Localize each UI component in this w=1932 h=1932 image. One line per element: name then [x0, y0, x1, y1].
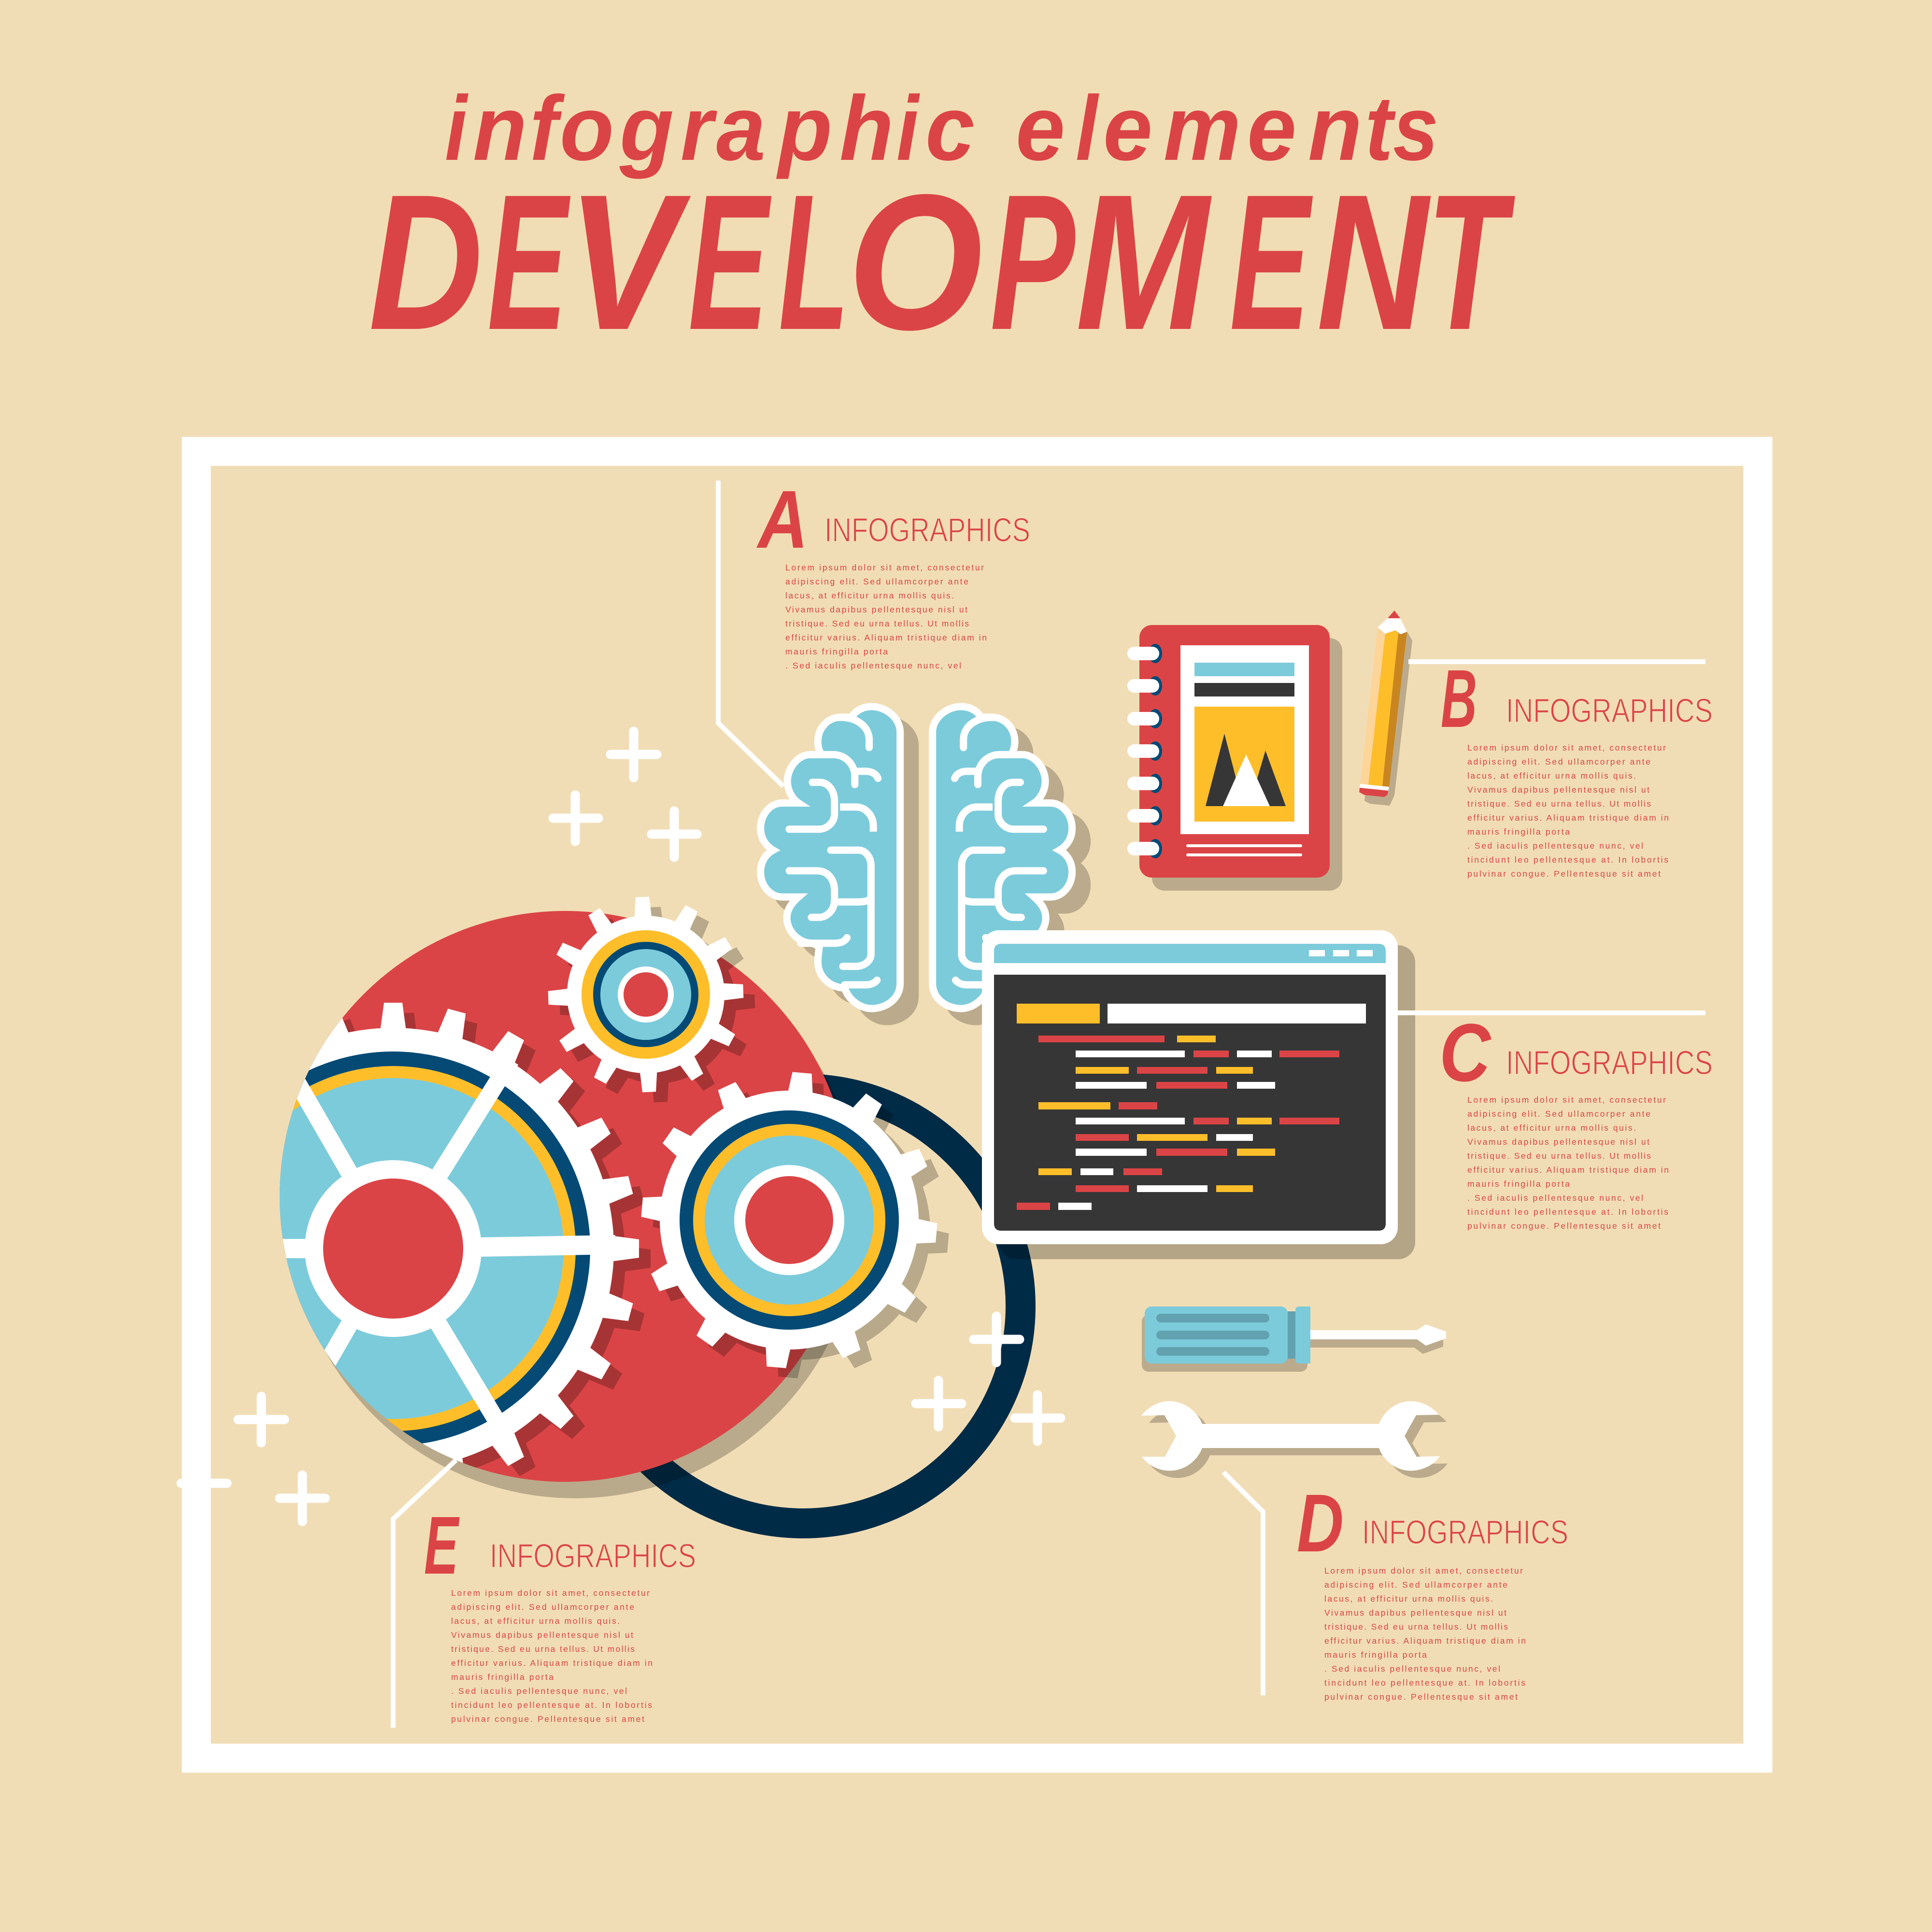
title: infographic elements: i: [896, 77, 921, 180]
section D: [1297, 1477, 1568, 1702]
section E: adipiscing elit. Sed ullamcorper ante: [451, 1602, 634, 1612]
large gear: [280, 1003, 651, 1476]
section E: E: [424, 1500, 460, 1591]
section B: B: [1441, 653, 1477, 745]
section E: tristique. Sed eu urna tellus. Ut mollis: [451, 1644, 635, 1654]
title: infographic elements: e: [1103, 77, 1152, 180]
section D: tincidunt leo pellentesque at. In lobortis: [1324, 1678, 1525, 1688]
section B: lacus, at efficitur urna mollis quis.: [1467, 771, 1636, 781]
section B: adipiscing elit. Sed ullamcorper ante: [1467, 757, 1650, 767]
title: DEVELOPMENT: M: [1076, 154, 1213, 370]
plus signs: [181, 731, 1061, 1521]
section D: Vivamus dapibus pellentesque nisl ut: [1324, 1608, 1506, 1618]
wrench: [1141, 1401, 1448, 1478]
title: infographic elements: h: [839, 77, 894, 180]
leader lines: [393, 481, 1705, 1728]
section D: . Sed iaculis pellentesque nunc, vel: [1324, 1664, 1500, 1674]
section D: D: [1297, 1477, 1344, 1569]
title: infographic elements: t: [1365, 77, 1396, 180]
code window: [982, 930, 1415, 1259]
section C: adipiscing elit. Sed ullamcorper ante: [1467, 1109, 1650, 1119]
pencil: [1359, 611, 1412, 806]
title: infographic elements: g: [619, 77, 674, 180]
section A: lacus, at efficitur urna mollis quis.: [785, 591, 954, 600]
section B: INFOGRAPHICS: [1506, 692, 1713, 729]
section D: pulvinar congue. Pellentesque sit amet: [1324, 1692, 1518, 1702]
section A: Lorem ipsum dolor sit amet, consectetur: [785, 563, 984, 572]
title: infographic elements: c: [925, 77, 975, 180]
section C: INFOGRAPHICS: [1506, 1044, 1713, 1081]
section C: Lorem ipsum dolor sit amet, consectetur: [1467, 1095, 1666, 1105]
section C: tristique. Sed eu urna tellus. Ut mollis: [1467, 1151, 1651, 1161]
small gear: [548, 896, 755, 1103]
section A: A: [756, 474, 808, 566]
section D: efficitur varius. Aliquam tristique diam in: [1324, 1636, 1526, 1646]
section A: Vivamus dapibus pellentesque nisl ut: [785, 605, 967, 614]
section C: . Sed iaculis pellentesque nunc, vel: [1467, 1193, 1643, 1203]
title: DEVELOPMENT: E: [1230, 154, 1314, 370]
brain: [761, 707, 1087, 1022]
white frame: [196, 451, 1758, 1758]
section E: Lorem ipsum dolor sit amet, consectetur: [451, 1588, 650, 1598]
section E: efficitur varius. Aliquam tristique diam in: [451, 1658, 653, 1668]
medium gear: [641, 1072, 949, 1378]
section D: lacus, at efficitur urna mollis quis.: [1324, 1594, 1493, 1604]
section A: . Sed iaculis pellentesque nunc, vel: [785, 661, 961, 670]
section D: tristique. Sed eu urna tellus. Ut mollis: [1324, 1622, 1508, 1632]
section B: Vivamus dapibus pellentesque nisl ut: [1467, 785, 1649, 795]
title: infographic elements: n: [1308, 77, 1362, 180]
section B: efficitur varius. Aliquam tristique diam in: [1467, 813, 1669, 823]
section E: lacus, at efficitur urna mollis quis.: [451, 1616, 620, 1626]
section E: mauris fringilla porta: [451, 1672, 554, 1682]
section A: [756, 474, 1030, 670]
title: DEVELOPMENT: E: [487, 154, 572, 370]
section B: mauris fringilla porta: [1467, 827, 1570, 837]
section B: tincidunt leo pellentesque at. In lobortis: [1467, 855, 1668, 865]
section D: mauris fringilla porta: [1324, 1650, 1427, 1660]
section C: [1439, 1007, 1713, 1231]
section B: tristique. Sed eu urna tellus. Ut mollis: [1467, 799, 1651, 809]
title: infographic elements: i: [445, 77, 469, 180]
section C: lacus, at efficitur urna mollis quis.: [1467, 1123, 1636, 1133]
section D: adipiscing elit. Sed ullamcorper ante: [1324, 1580, 1507, 1590]
infographic canvas: [177, 93, 1773, 1773]
screwdriver: [1142, 1307, 1446, 1372]
section B: pulvinar congue. Pellentesque sit amet: [1467, 869, 1661, 879]
section A: efficitur varius. Aliquam tristique diam in: [785, 633, 987, 642]
section E: [424, 1500, 696, 1724]
section E: INFOGRAPHICS: [490, 1537, 696, 1575]
title: DEVELOPMENT: O: [848, 154, 983, 370]
section B: Lorem ipsum dolor sit amet, consectetur: [1467, 743, 1666, 753]
notebook: [1127, 625, 1342, 891]
section C: Vivamus dapibus pellentesque nisl ut: [1467, 1137, 1649, 1147]
section E: tincidunt leo pellentesque at. In lobortis: [451, 1700, 652, 1710]
title: infographic elements: n: [473, 77, 527, 180]
title: DEVELOPMENT: P: [990, 154, 1076, 370]
section A: tristique. Sed eu urna tellus. Ut mollis: [785, 619, 969, 628]
title: infographic elements: l: [1076, 77, 1100, 180]
title: DEVELOPMENT: L: [779, 154, 849, 370]
section D: Lorem ipsum dolor sit amet, consectetur: [1324, 1566, 1523, 1576]
section C: pulvinar congue. Pellentesque sit amet: [1467, 1221, 1661, 1231]
section A: INFOGRAPHICS: [824, 511, 1030, 549]
section C: mauris fringilla porta: [1467, 1179, 1570, 1189]
section B: [1441, 653, 1713, 879]
title: infographic elements: p: [776, 77, 832, 180]
title: infographic elements: s: [1393, 77, 1438, 180]
section C: tincidunt leo pellentesque at. In lobortis: [1467, 1207, 1668, 1217]
section A: adipiscing elit. Sed ullamcorper ante: [785, 577, 968, 586]
title: DEVELOPMENT: T: [1427, 154, 1516, 370]
title: DEVELOPMENT: V: [567, 154, 693, 370]
red circle with shadow: [280, 911, 860, 1498]
title: infographic elements: a: [716, 77, 766, 180]
section A: mauris fringilla porta: [785, 647, 888, 656]
section E: Vivamus dapibus pellentesque nisl ut: [451, 1630, 633, 1640]
title: infographic elements: e: [1247, 77, 1296, 180]
section E: . Sed iaculis pellentesque nunc, vel: [451, 1686, 627, 1696]
title: infographic elements: r: [681, 77, 717, 180]
title: infographic elements: m: [1164, 77, 1241, 180]
section D: INFOGRAPHICS: [1362, 1513, 1568, 1551]
section E: pulvinar congue. Pellentesque sit amet: [451, 1714, 644, 1724]
title: DEVELOPMENT: E: [688, 154, 773, 370]
title: infographic elements: o: [560, 77, 614, 180]
title: infographic elements: e: [1016, 77, 1065, 180]
title: infographic elements: f: [530, 77, 565, 180]
section C: efficitur varius. Aliquam tristique diam in: [1467, 1165, 1669, 1175]
title: DEVELOPMENT: N: [1317, 154, 1433, 370]
section B: . Sed iaculis pellentesque nunc, vel: [1467, 841, 1643, 851]
title: DEVELOPMENT: D: [369, 154, 483, 370]
navy ring: [586, 1089, 1021, 1523]
section C: C: [1439, 1007, 1492, 1099]
